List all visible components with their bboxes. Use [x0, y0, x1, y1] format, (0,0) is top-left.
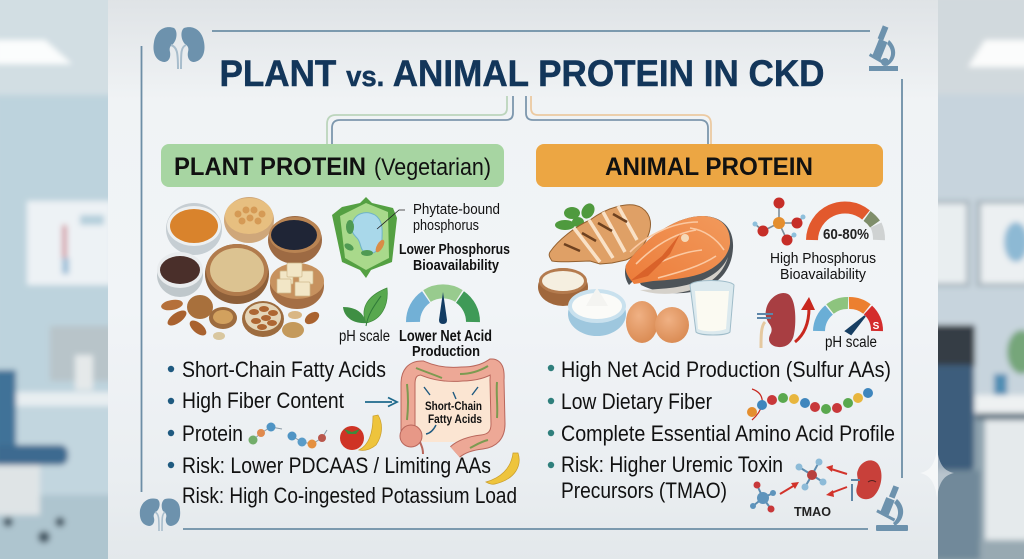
label: short-chain fatty acids: Short-Chain	[425, 401, 482, 413]
list: animal protein bullets	[548, 357, 895, 503]
bowl: black beans	[268, 216, 322, 264]
gauge: lower net acid	[413, 291, 473, 324]
list: plant protein bullets: High Fiber Content	[182, 388, 344, 413]
header: plant protein: (Vegetarian)	[374, 154, 491, 181]
header: plant protein: PLANT PROTEIN	[174, 153, 366, 181]
header: plant protein	[161, 144, 504, 187]
label: short-chain fatty acids: Fatty Acids	[428, 414, 482, 426]
label: high phosphorus bioavailability	[770, 250, 876, 283]
icon: banana	[486, 453, 519, 484]
gauge: animal ph scale: S	[873, 321, 880, 332]
gauge: high phosphorus 60-80%	[812, 207, 879, 243]
icon: kidneys top-left	[153, 27, 205, 69]
icon: sparkle	[920, 448, 954, 498]
list: plant protein bullets: Protein	[182, 421, 243, 446]
bowl: tofu	[270, 263, 324, 309]
chicken	[549, 205, 650, 264]
illustration: animal foods	[538, 201, 734, 343]
label: high phosphorus bioavailability: High Phosphorus	[770, 250, 876, 267]
herb	[555, 201, 597, 230]
list: animal protein bullets: Precursors (TMAO)	[561, 478, 727, 503]
header: animal protein: ANIMAL PROTEIN	[605, 153, 813, 181]
label: high phosphorus bioavailability: Bioavailability	[780, 266, 866, 283]
icon: tomato and banana	[340, 415, 382, 450]
title: PLANT vs. ANIMAL PROTEIN IN CKD	[220, 53, 824, 94]
list: plant protein bullets: Risk: High Co-ingested Potassium Load	[182, 483, 517, 508]
label: short-chain fatty acids	[425, 401, 482, 426]
icon: amino acid chain animal	[747, 388, 873, 420]
label: lower phosphorus bioavailability	[399, 242, 510, 274]
list: animal protein bullets: High Net Acid Production (Sulfur AAs)	[561, 357, 891, 382]
icon: microscope top-right	[869, 25, 898, 71]
icon: plant cell	[332, 197, 405, 278]
icon: microscope bottom-right	[876, 485, 908, 531]
illustration: colon with short-chain fatty acids	[400, 366, 498, 454]
milk glass	[690, 280, 734, 335]
icon: amino acid chain plant	[248, 422, 327, 448]
nuts	[160, 295, 321, 340]
label: phytate-bound phosphorus: phosphorus	[413, 217, 479, 234]
label: lower net acid production	[399, 328, 492, 360]
label: phytate-bound phosphorus: Phytate-bound	[413, 201, 500, 218]
list: animal protein bullets: Low Dietary Fiber	[561, 389, 712, 414]
connectors	[327, 96, 711, 144]
bowl: grain	[205, 244, 269, 304]
bowl: chickpeas	[224, 197, 274, 243]
icon: tmao molecules with kidney	[750, 458, 881, 512]
gauge: animal ph scale	[819, 303, 880, 334]
label: lower phosphorus bioavailability: Lower Phosphorus	[399, 242, 510, 258]
icon: kidney with red arrow	[757, 293, 815, 348]
list: plant protein bullets: Risk: Lower PDCAAS / Limiting AAs	[182, 453, 491, 478]
list: animal protein bullets: Risk: Higher Uremic Toxin	[561, 452, 783, 477]
gauge: high phosphorus 60-80%: 60-80%	[823, 227, 869, 243]
label: ph scale animal: pH scale	[825, 334, 877, 351]
bowl: yogurt	[568, 288, 626, 336]
salmon	[625, 216, 733, 294]
bowl: lentils	[166, 203, 222, 255]
label: tmao: TMAO	[794, 504, 831, 519]
list: plant protein bullets	[168, 357, 517, 508]
illustration: plant foods	[157, 197, 324, 340]
frame lines	[142, 31, 902, 529]
background: blurred clinic room right	[930, 0, 1024, 559]
list: plant protein bullets: Short-Chain Fatty Acids	[182, 357, 386, 382]
icon: kidneys bottom-left	[140, 498, 180, 531]
eggs	[626, 301, 689, 343]
label: ph scale plant: pH scale	[339, 328, 390, 345]
bowl: brown cream	[538, 268, 588, 306]
label: phytate-bound phosphorus	[413, 201, 500, 234]
header: animal protein	[536, 144, 883, 187]
label: lower net acid production: Lower Net Acid	[399, 328, 492, 345]
bowl: dark quinoa	[157, 252, 203, 297]
icon: phosphate molecule	[752, 198, 806, 246]
arrow: fiber to colon	[365, 398, 397, 406]
background: blurred clinic room left	[0, 0, 114, 559]
label: lower net acid production: Production	[412, 344, 480, 360]
icon: leaves	[343, 288, 387, 326]
label: lower phosphorus bioavailability: Bioavailability	[413, 258, 499, 274]
list: animal protein bullets: Complete Essential Amino Acid Profile	[561, 421, 895, 446]
